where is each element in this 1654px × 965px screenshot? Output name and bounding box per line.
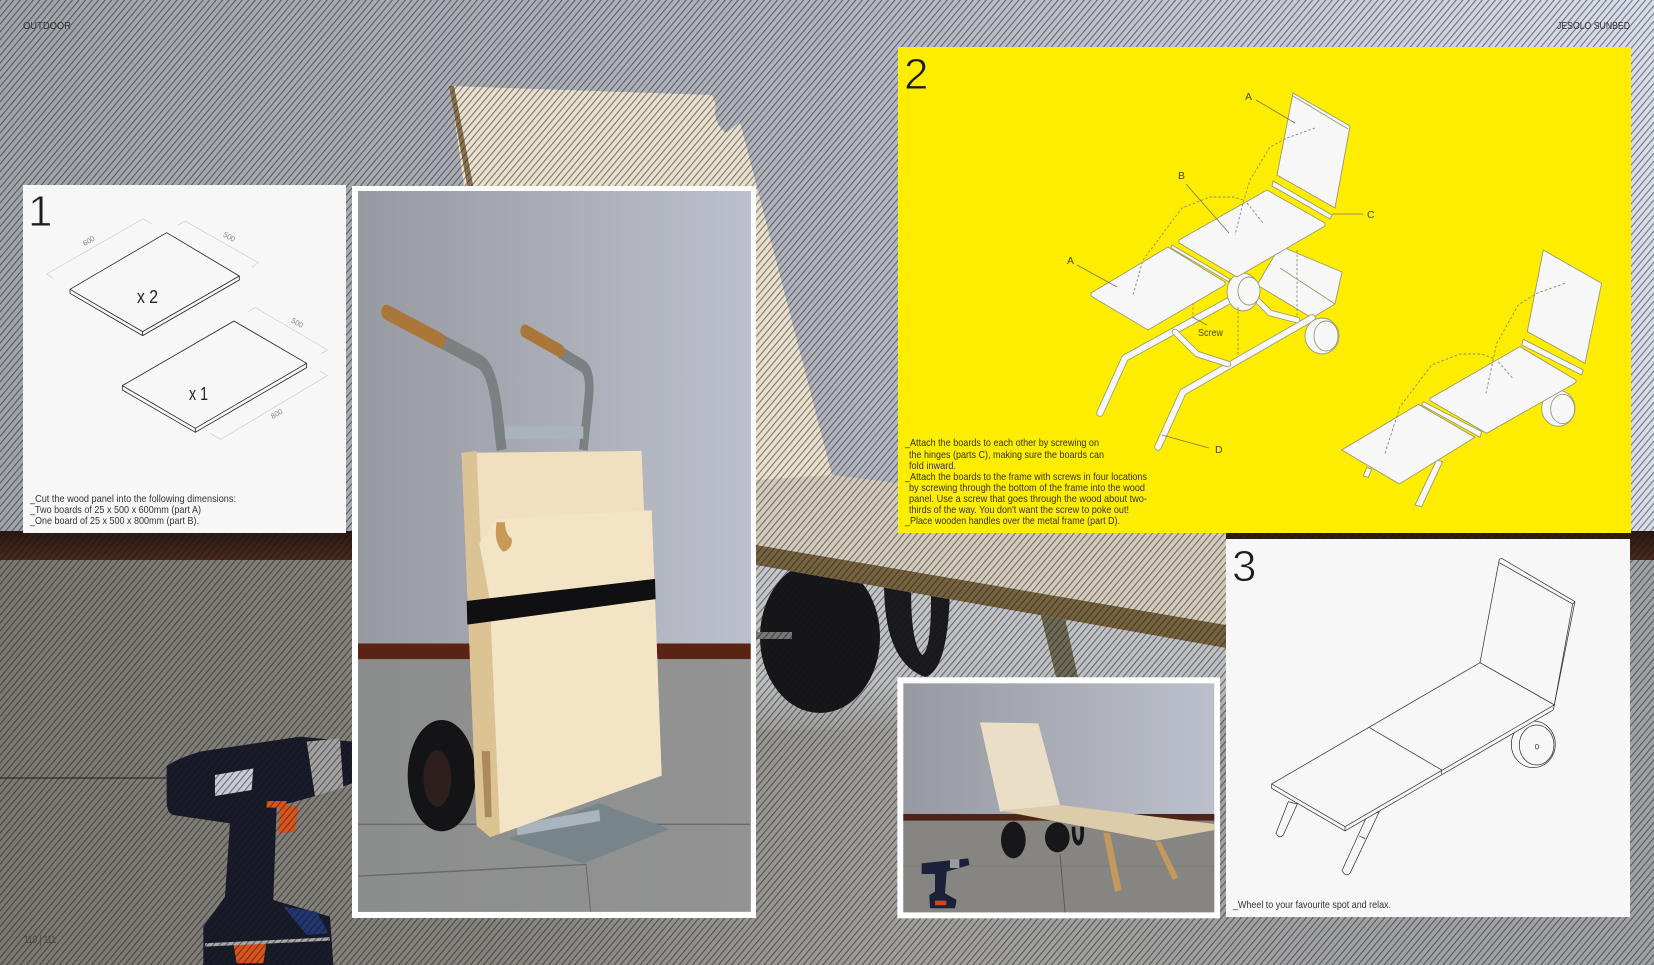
panel: step 2: [898, 47, 1631, 533]
exploded: backrest board A: [1277, 93, 1350, 208]
diagram: boards cut: [47, 219, 327, 439]
quantity x 2: x 2: [137, 287, 158, 307]
exploded: hinge C upper: [1272, 181, 1332, 219]
instructions step 3: _Wheel to your favourite spot and relax.: [1232, 899, 1391, 911]
dimension labels: 500: [222, 230, 237, 244]
exploded: hinge C lower: [1171, 245, 1230, 282]
quantity x 1: x 1: [189, 384, 208, 404]
photo: boards strapped on hand truck: [352, 186, 756, 918]
exploded: wheels: [1227, 273, 1259, 311]
part labels: B: [1178, 170, 1185, 182]
background: wheel: [760, 561, 880, 713]
instructions step 2: [904, 437, 1147, 527]
dimension labels: 600: [81, 234, 96, 248]
background: strap: [884, 560, 950, 677]
exploded: rear frame section: [1257, 246, 1342, 318]
panel: step 1: [23, 185, 346, 533]
diagram: second view with dashed screws: [1342, 250, 1602, 507]
instructions step 2: panel. Use a screw that goes through the wood about two-: [909, 493, 1147, 505]
sunbed backrest: [980, 722, 1060, 812]
instructions step 2: _Attach the boards to the frame with screws in four locations: [904, 471, 1147, 483]
leader lines: [1077, 100, 1363, 448]
part labels: [1067, 91, 1375, 456]
part labels: Screw: [1198, 327, 1223, 339]
sunbed seat: [1000, 805, 1214, 841]
diagram: finished sunbed: [1272, 558, 1575, 875]
hand truck foot plate: [508, 803, 670, 863]
page numbers: 110 | 111: [24, 934, 56, 946]
dashed screw paths: [1133, 128, 1315, 357]
header: project name: JESOLO SUNBED: [1557, 20, 1630, 32]
dimension labels: 500: [290, 316, 305, 330]
black strap: [467, 579, 656, 625]
instructions step 2: fold inward.: [909, 460, 956, 472]
background: seat edge: [756, 545, 1226, 648]
wood boards: [462, 451, 662, 837]
sunbed wheels: [1001, 822, 1026, 858]
photo: finished sunbed with drill: [897, 677, 1220, 918]
instructions step 1: [29, 493, 236, 527]
instructions step 1: _One board of 25 x 500 x 800mm (part B).: [29, 515, 199, 527]
background: wooden back board: [352, 86, 1226, 648]
exploded: lower board A: [1091, 247, 1225, 330]
part labels: A: [1067, 255, 1074, 267]
step number 3: 3: [1232, 542, 1256, 591]
instructions step 2: by screwing through the bottom of the frame into the wood: [909, 482, 1145, 494]
instructions step 2: the hinges (parts C), making sure the boards can: [909, 449, 1104, 461]
panel: step 3: [1226, 539, 1630, 917]
step number 1: 1: [28, 187, 52, 236]
part labels: D: [1215, 444, 1223, 456]
instructions step 1: _Two boards of 25 x 500 x 600mm (part A): [29, 504, 201, 516]
hand truck wheel: [408, 720, 476, 831]
drill small: [922, 858, 969, 908]
instructions step 2: _Attach the boards to each other by screwing on: [904, 437, 1099, 449]
background: leg: [1037, 600, 1078, 677]
header: section name: OUTDOOR: [23, 20, 71, 32]
part labels: A: [1245, 91, 1252, 103]
exploded: frame tubes: [1100, 291, 1312, 447]
instructions step 1: _Cut the wood panel into the following dimensions:: [29, 493, 236, 505]
sunbed legs: [1103, 833, 1122, 892]
dimension labels: 800: [269, 407, 284, 421]
instructions step 2: _Place wooden handles over the metal frame (part D).: [904, 515, 1120, 527]
part labels: C: [1367, 209, 1375, 221]
instructions step 2: thirds of the way. You don't want the screw to poke out!: [909, 504, 1129, 516]
background: drill: [167, 737, 352, 965]
diagram: exploded assembly: [1091, 93, 1350, 447]
step number 2: 2: [904, 50, 928, 99]
hand truck handles: [387, 312, 589, 450]
dimension labels: [81, 230, 305, 421]
exploded: seat board B: [1179, 190, 1325, 277]
